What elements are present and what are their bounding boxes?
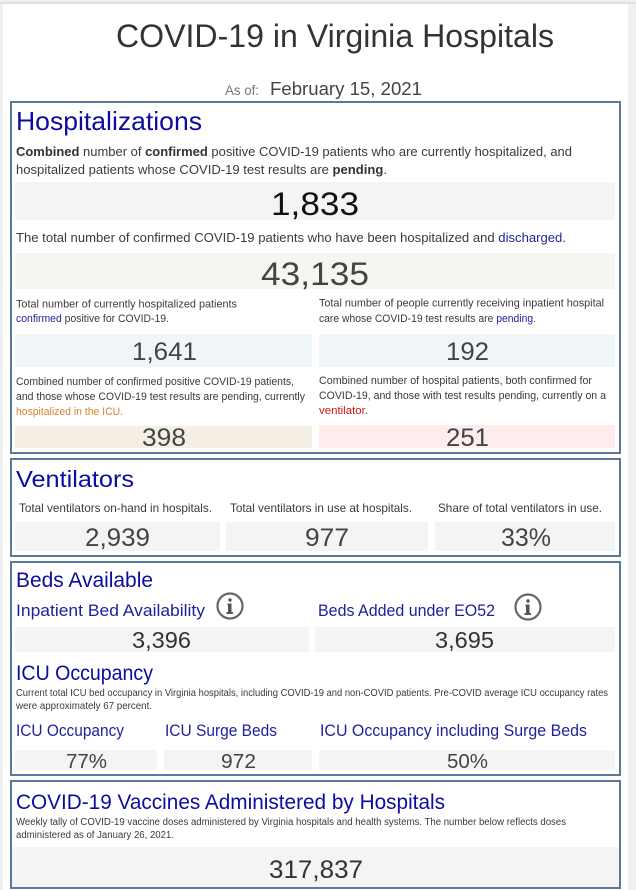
text: confirmed description: Total number of currently hospitalized patients (16, 298, 237, 310)
text: vaccines description (16, 817, 566, 841)
stat: combined hospitalized 1,833: 1,833 (271, 186, 359, 222)
stat: vaccines 317,837 (12, 847, 619, 887)
text: ICU description: and those whose COVID-19 test results are pending, currently (16, 391, 305, 403)
text: pending description: care whose COVID-19 test results are pending. (319, 313, 536, 325)
stat: ICU occupancy including surge 50%: 50% (447, 751, 488, 773)
stat: ventilators in use (226, 501, 428, 552)
text: ventilator description (319, 375, 607, 417)
stat: ICU occupancy including surge 50%: ICU Occupancy including Surge Beds (320, 721, 587, 740)
text: pending description: Total number of people currently receiving inpatient hospital (319, 298, 604, 310)
text: combined description (16, 144, 572, 177)
heading: hospitalizations: Hospitalizations (16, 106, 202, 136)
stat: beds added 3,695 (315, 627, 615, 653)
stat: ventilator 251 (319, 424, 615, 452)
text: ICU description: Current total ICU bed occupancy in Virginia hospitals, including COVID-19 and non-COVID patients. Pre-COVID average ICU occupancy rates (16, 688, 608, 699)
text: vaccines description: Weekly tally of COVID-19 vaccine doses administered by Virginia hospitals and health systems. The number below reflects doses (16, 817, 566, 828)
stat: share of ventilators: Share of total ventilators in use. (438, 501, 602, 515)
stat: share of ventilators: 33% (501, 524, 551, 552)
stat: ICU 398 (15, 424, 312, 452)
stat: ventilators on-hand: Total ventilators on-hand in hospitals. (19, 501, 212, 515)
heading: ventilators: Ventilators (16, 466, 134, 492)
stat: pending 192: 192 (446, 338, 489, 366)
stat: combined hospitalized 1,833 (15, 182, 615, 222)
text: confirmed description: confirmed positive for COVID-19. (16, 313, 169, 325)
stat: ICU occupancy including surge 50% (319, 721, 615, 773)
heading: vaccines: COVID-19 Vaccines Administered by Hospitals (16, 791, 445, 814)
text: vaccines description: administered as of January 26, 2021. (16, 830, 174, 841)
text: ICU description: Combined number of confirmed positive COVID-19 patients, (16, 376, 294, 388)
stat: ventilator 251: 251 (446, 424, 489, 452)
text: ICU description (16, 376, 305, 418)
stat: inpatient beds 3,396 (15, 627, 309, 653)
as-of date: As of: (225, 83, 259, 98)
stat: ICU occupancy 77%: 77% (66, 751, 107, 773)
as-of date: February 15, 2021 (270, 78, 422, 99)
stat: discharged 43,135 (15, 253, 615, 292)
text: pending description (319, 298, 604, 325)
stat: discharged 43,135: 43,135 (261, 256, 369, 292)
title: COVID-19 in Virginia Hospitals (116, 18, 554, 54)
stat: ICU surge beds 972: ICU Surge Beds (165, 721, 277, 740)
stat: ventilators in use: 977 (305, 524, 349, 552)
stat: confirmed 1,641 (15, 334, 312, 367)
panel: hospitalizations (11, 102, 620, 453)
text: ICU description: were approximately 67 percent. (15, 701, 152, 712)
stat: inpatient beds 3,396: 3,396 (132, 627, 191, 653)
text: combined description: hospitalized patients whose COVID-19 test results are pending. (16, 162, 387, 177)
icon: info (516, 594, 540, 620)
label: inpatient bed availability: Inpatient Bed Availability (16, 601, 206, 620)
stat: pending 192 (319, 334, 615, 367)
stat: vaccines 317,837: 317,837 (269, 856, 363, 884)
stat: ventilators in use: Total ventilators in use at hospitals. (230, 501, 412, 515)
panel: vaccines (11, 781, 620, 888)
icon: info (218, 594, 242, 618)
text: ICU description (15, 688, 608, 712)
text: ventilator description: ventilator. (319, 405, 368, 417)
stat: share of ventilators (435, 501, 615, 552)
panel: ventilators (11, 459, 620, 556)
stat: confirmed 1,641: 1,641 (132, 338, 197, 366)
stat: ventilators on-hand (15, 501, 220, 552)
panel: beds available (11, 562, 620, 775)
stat: ventilators on-hand: 2,939 (85, 524, 150, 552)
stat: ICU surge beds 972 (164, 721, 312, 773)
text: ICU description: hospitalized in the ICU. (16, 406, 123, 418)
stat: ICU 398: 398 (142, 424, 186, 452)
text: ventilator description: Combined number of hospital patients, both confirmed for (319, 375, 592, 387)
stat: ICU surge beds 972: 972 (221, 751, 256, 773)
text: ventilator description: COVID-19, and those with test results pending, currently on a (319, 390, 607, 402)
text: discharged description: The total number of confirmed COVID-19 patients who have been hospitalized and discharged. (16, 230, 566, 245)
text: confirmed description (16, 298, 237, 325)
text: combined description: Combined number of confirmed positive COVID-19 patients who are currently hospitalized, and (16, 144, 572, 159)
stat: beds added 3,695: 3,695 (435, 627, 494, 653)
heading: ICU occupancy: ICU Occupancy (16, 662, 153, 685)
label: beds added under EO52: Beds Added under EO52 (318, 601, 495, 620)
heading: beds available: Beds Available (16, 569, 153, 592)
stat: ICU occupancy 77% (15, 721, 157, 773)
stat: ICU occupancy 77%: ICU Occupancy (16, 721, 124, 740)
